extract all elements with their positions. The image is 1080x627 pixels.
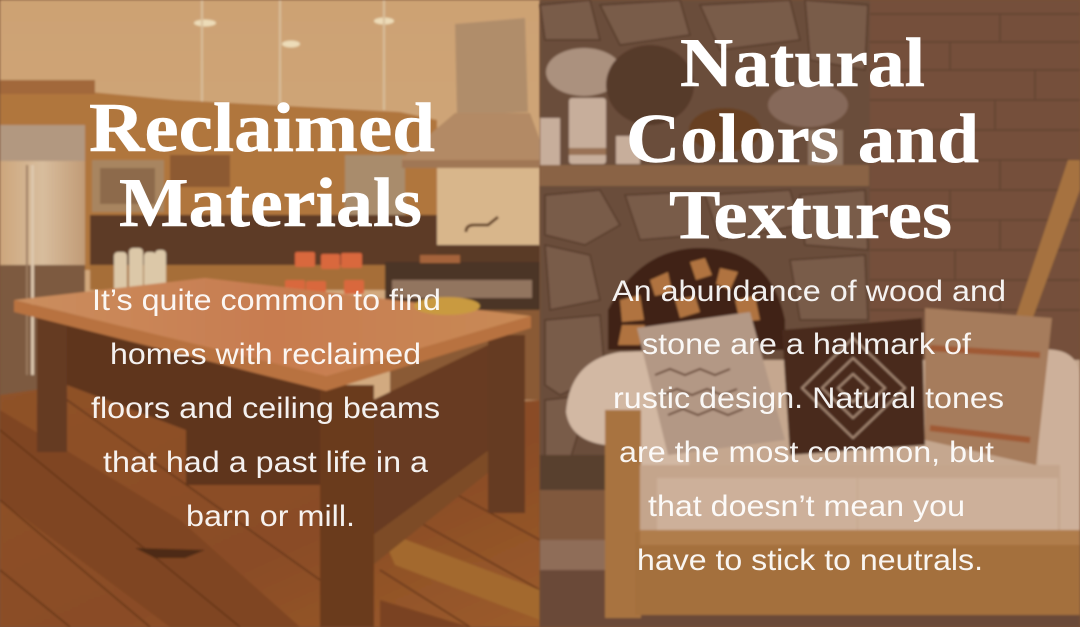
text block: natural colors body: rustic design. Natural tones (613, 382, 1004, 415)
stone wall (540, 0, 870, 490)
lower cabinets (85, 300, 325, 395)
panel: living room background (540, 0, 1080, 627)
upper cabinets (0, 80, 437, 270)
heading: Reclaimed Materials: Materials (119, 165, 422, 242)
heading: Reclaimed Materials: Reclaimed (89, 90, 435, 167)
ceiling lights (194, 0, 394, 135)
wood plank wall (868, 0, 1080, 360)
backsplash (437, 168, 540, 246)
text block: reclaimed materials body: homes with reclaimed (110, 338, 421, 371)
text block: natural colors body: that doesn’t mean you (648, 490, 965, 523)
range hood (402, 18, 540, 168)
vases (540, 98, 843, 165)
refrigerator (0, 125, 85, 395)
orange mugs (285, 252, 364, 295)
text block: natural colors body: stone are a hallmark of (642, 328, 972, 361)
text block: natural colors body: An abundance of wood and (612, 275, 1006, 308)
floor (0, 385, 540, 627)
wooden beam (1016, 160, 1080, 320)
text block: natural colors body: are the most common, but (619, 436, 995, 469)
yellow bowl (414, 297, 480, 315)
text block: reclaimed materials body: floors and ceiling beams (91, 392, 440, 425)
sofa (566, 349, 1080, 618)
flowers (546, 45, 848, 152)
panel: kitchen background (0, 0, 540, 627)
text block: reclaimed materials body: that had a past life in a (103, 446, 428, 479)
bottles (114, 248, 166, 296)
heading: Natural Colors and Textures: Textures (669, 177, 952, 254)
range (385, 255, 540, 310)
text block: reclaimed materials body: It’s quite common to find (92, 284, 441, 317)
mantel shelf (540, 165, 869, 186)
heading: Reclaimed Materials (89, 90, 435, 242)
text block: reclaimed materials body: barn or mill. (186, 500, 355, 533)
heading: Natural Colors and Textures (626, 25, 979, 254)
pillows (637, 308, 1052, 465)
heading: Natural Colors and Textures: Natural (680, 25, 925, 102)
log niche (608, 248, 785, 350)
text block: natural colors body: have to stick to neutrals. (637, 544, 983, 577)
heading: Natural Colors and Textures: Colors and (626, 101, 979, 178)
kitchen island (14, 278, 531, 627)
floor (540, 490, 1080, 627)
counter backsplash (90, 215, 437, 267)
text block: natural colors body (612, 275, 1006, 577)
faucet (466, 217, 498, 232)
text block: reclaimed materials body (91, 284, 441, 533)
